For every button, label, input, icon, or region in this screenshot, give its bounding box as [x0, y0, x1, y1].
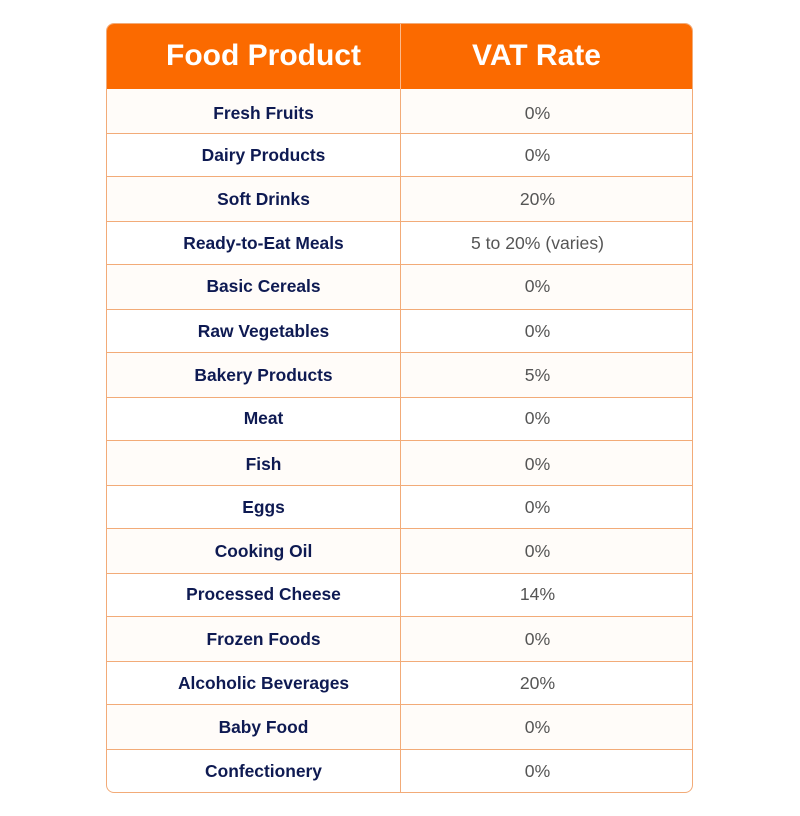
row: Baby Food: 0%	[525, 717, 550, 737]
heading: Food Product: Food Product	[166, 39, 361, 72]
row: Fresh Fruits: Fresh Fruits	[213, 103, 314, 123]
row: Ready-to-Eat Meals	[106, 222, 693, 265]
row: Dairy Products	[106, 134, 693, 177]
row: Cooking Oil	[106, 529, 693, 574]
row: Fish: 0%	[525, 454, 550, 474]
row: Frozen Foods	[106, 617, 693, 662]
row: Processed Cheese: Processed Cheese	[186, 584, 341, 604]
row: Bakery Products: 5%	[525, 365, 550, 385]
row: Alcoholic Beverages	[106, 662, 693, 705]
row: Raw Vegetables: Raw Vegetables	[198, 321, 329, 341]
row: Basic Cereals	[106, 265, 693, 310]
row: Soft Drinks: 20%	[520, 189, 555, 209]
row: Confectionery	[205, 761, 550, 781]
row: Processed Cheese	[106, 574, 693, 617]
row: Basic Cereals: Basic Cereals	[206, 276, 321, 296]
row: Confectionery: Confectionery	[205, 761, 322, 781]
row: Fresh Fruits	[106, 89, 693, 134]
table header row	[106, 23, 693, 90]
row: Dairy Products: Dairy Products	[202, 145, 325, 165]
row: Eggs: 0%	[525, 497, 550, 517]
row: Raw Vegetables	[106, 310, 693, 353]
row: Fish: Fish	[246, 454, 281, 474]
row: Frozen Foods: 0%	[525, 629, 550, 649]
row: Frozen Foods: Frozen Foods	[206, 629, 320, 649]
row: Cooking Oil: Cooking Oil	[215, 541, 312, 561]
row: Bakery Products: Bakery Products	[194, 365, 333, 385]
row: Confectionery: 0%	[525, 761, 550, 781]
row: Raw Vegetables: 0%	[525, 321, 550, 341]
row: Baby Food: Baby Food	[219, 717, 308, 737]
row: Baby Food	[106, 705, 693, 750]
row: Meat: 0%	[525, 408, 550, 428]
row: Alcoholic Beverages: Alcoholic Beverages	[178, 673, 349, 693]
row: Cooking Oil: 0%	[525, 541, 550, 561]
row: Soft Drinks: Soft Drinks	[217, 189, 310, 209]
row: Fresh Fruits: 0%	[525, 103, 550, 123]
row: Meat	[106, 398, 693, 441]
row: Ready-to-Eat Meals: Ready-to-Eat Meals	[183, 233, 344, 253]
row: Bakery Products	[106, 353, 693, 398]
table: food product VAT rates	[106, 23, 693, 793]
row: Dairy Products: 0%	[525, 145, 550, 165]
row: Soft Drinks	[106, 177, 693, 222]
row: Meat: Meat	[244, 408, 283, 428]
heading: VAT Rate: VAT Rate	[472, 39, 601, 72]
row: Alcoholic Beverages: 20%	[520, 673, 555, 693]
row: Eggs	[106, 486, 693, 529]
row: Ready-to-Eat Meals: 5 to 20% (varies)	[471, 233, 604, 253]
row: Basic Cereals: 0%	[525, 276, 550, 296]
row: Eggs: Eggs	[242, 497, 285, 517]
row: Fish	[106, 441, 693, 486]
row: Processed Cheese: 14%	[520, 584, 555, 604]
